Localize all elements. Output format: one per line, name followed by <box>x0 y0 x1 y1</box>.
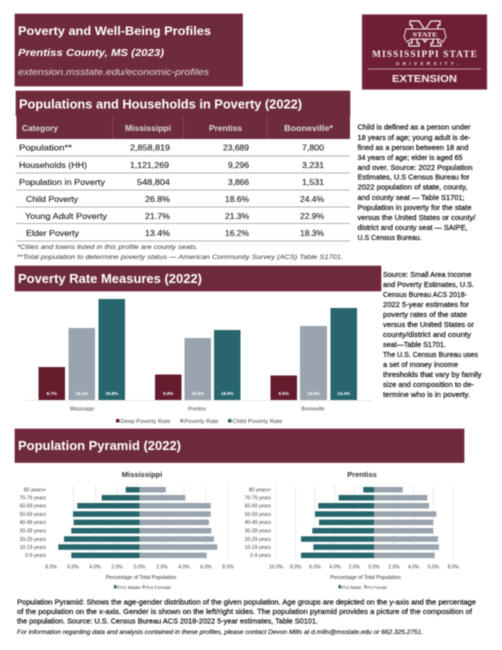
female bars <box>140 487 217 558</box>
row: child poverty <box>26 194 324 204</box>
row: child poverty: 26.8% <box>145 194 170 204</box>
row: young adult poverty: 22.9% <box>300 211 324 221</box>
age labels: 50-59 years <box>20 512 46 518</box>
row: elder poverty: 16.2% <box>225 228 249 238</box>
row: population in poverty <box>19 177 324 187</box>
chart title: Prentiss <box>347 470 377 479</box>
male bars <box>301 487 374 558</box>
x axis ticks: 6.0% <box>428 564 440 570</box>
side note: source: size and composition to de- <box>383 380 474 389</box>
row: population in poverty: Population in Poverty <box>19 177 106 187</box>
section heading: populations and households: Populations and Households in Poverty (2022) <box>19 96 302 112</box>
side note: source: and Poverty Estimates, U.S. <box>383 280 474 289</box>
side note: definitions: and county seat — Table S1701; <box>358 193 464 202</box>
side note: definitions: 34 years of age; elder is aged 65 <box>358 153 462 162</box>
bars: Booneville <box>270 308 357 412</box>
x axis ticks: 4.0% <box>329 564 341 570</box>
x axis ticks: 2.0% <box>349 564 361 570</box>
x axis ticks: 6.0% <box>200 564 212 570</box>
pyramid legend: Pct Male <box>117 585 141 591</box>
chart title: Mississippi <box>122 470 162 479</box>
side note: definitions: and over. Source: 2022 Population <box>358 163 472 172</box>
side note: definitions: versus the United States or county/ <box>358 213 476 222</box>
table footnotes: **Total population to determine poverty status — American Community Survey (ACS) Table S1701. <box>17 254 343 261</box>
side note: definitions: 18 years of age; young adult is de- <box>358 133 471 142</box>
row: young adult poverty: Young Adult Poverty <box>25 211 108 221</box>
x axis ticks: 8.0% <box>45 564 57 570</box>
pyramid legend <box>114 585 171 591</box>
x axis ticks: 0.0% <box>134 564 146 570</box>
age labels: 40-49 years <box>245 520 271 526</box>
x axis ticks: 8.0% <box>222 564 234 570</box>
section heading: population pyramid: Population Pyramid (2022) <box>18 438 181 453</box>
row: population in poverty: 3,866 <box>228 177 249 187</box>
row: households: 9,296 <box>228 160 249 170</box>
side note: source: poverty rates of the state <box>383 310 467 319</box>
x axis ticks: 2.0% <box>388 564 400 570</box>
age labels: 60-69 years <box>245 504 271 510</box>
row: young adult poverty: 21.3% <box>225 211 249 221</box>
section heading: poverty rate measures <box>15 266 381 291</box>
row: child poverty: 18.6% <box>225 194 249 204</box>
male bars <box>58 487 139 558</box>
side note: source: 2022 5-year estimates for <box>383 300 470 309</box>
x axis title: Percentage of Total Population <box>106 575 176 581</box>
logo: Mississippi State Extension <box>362 14 487 90</box>
bars: Mississippi <box>38 299 125 412</box>
side note: source: Census Bureau ACS 2018- <box>383 290 467 299</box>
age labels: 10-19 years <box>245 545 271 551</box>
website link: extension.msstate.edu/economic-profiles <box>18 67 209 78</box>
x axis ticks: 4.0% <box>178 564 190 570</box>
age labels: 80 years+ <box>24 488 46 494</box>
age labels: 0-9 years <box>250 553 271 559</box>
section heading: poverty rate measures: Poverty Rate Measures (2022) <box>18 271 202 286</box>
chart legend: Deep Poverty Rate <box>120 419 170 425</box>
row: population in poverty: 548,804 <box>137 177 170 187</box>
header banner <box>15 14 242 86</box>
age labels: 80 years+ <box>249 488 271 494</box>
bars: Mississippi: 19.1% <box>75 391 88 396</box>
side note: source: county/district and county <box>383 330 471 339</box>
side note: definitions <box>358 122 476 242</box>
side note: definitions: 2022 population of state, county, <box>358 182 468 192</box>
table header: Booneville* <box>284 123 334 133</box>
bars: Prentiss: 16.5% <box>191 391 204 396</box>
pyramid legend: Pct Female <box>367 585 387 591</box>
row: elder poverty <box>26 228 324 238</box>
table footnotes <box>17 244 343 261</box>
pyramid legend: Pct Male <box>342 585 362 591</box>
row: elder poverty: Elder Poverty <box>26 228 80 238</box>
age labels: 70-79 years <box>20 496 46 502</box>
age labels: 0-9 years <box>25 553 46 559</box>
x axis ticks: 2.0% <box>111 564 123 570</box>
age labels: 20-29 years <box>245 537 271 543</box>
pyramid description <box>17 598 476 626</box>
x axis ticks: 6.0% <box>67 564 79 570</box>
chart legend <box>116 419 282 425</box>
bars: Booneville: Booneville <box>301 406 325 412</box>
bar chart: poverty rates <box>24 299 372 425</box>
row: elder poverty: 13.4% <box>145 228 170 238</box>
x axis ticks <box>269 564 460 570</box>
bars: Prentiss: 18.6% <box>221 391 234 396</box>
row: population: Population** <box>19 142 73 152</box>
side note: source: a set of money income <box>383 360 458 369</box>
pyramid description: of the population on the x-axis. Gender is shown on the left/right sides. The population pyramid provides a picture of the composition of <box>17 607 473 616</box>
age labels: 60-69 years <box>20 504 46 510</box>
age labels: 40-49 years <box>20 520 46 526</box>
pyramid chart: Prentiss <box>245 470 460 591</box>
poverty table <box>16 116 350 241</box>
row: population in poverty: 1,531 <box>302 177 324 187</box>
x axis ticks <box>45 564 234 570</box>
section heading: population pyramid <box>15 429 464 462</box>
row: young adult poverty: 21.7% <box>145 211 170 221</box>
bars: Booneville: 19.6% <box>307 391 320 396</box>
side note: definitions: Child is defined as a person under <box>358 122 471 132</box>
x axis ticks: 0.0% <box>368 564 380 570</box>
side note: source: seat—Table S1701. <box>383 340 446 349</box>
bars: Prentiss: 6.8% <box>163 391 173 396</box>
bars: Booneville: 6.5% <box>279 391 289 396</box>
age labels: 70-79 years <box>245 496 271 502</box>
x axis ticks: 4.0% <box>408 564 420 570</box>
row: young adult poverty <box>25 211 324 221</box>
logo extension: EXTENSION <box>392 73 457 85</box>
x axis title: Percentage of Total Population <box>330 575 401 581</box>
bars: Mississippi: Mississippi <box>70 406 94 412</box>
logo university: UNIVERSITY. <box>396 61 458 66</box>
side note: source <box>383 270 482 399</box>
row: population: 7,800 <box>302 142 324 152</box>
bars: Prentiss <box>155 330 240 412</box>
row: population: 23,689 <box>223 142 249 152</box>
age labels: 20-29 years <box>20 537 46 543</box>
side note: source: termine who is in poverty. <box>383 390 470 399</box>
age labels: 10-19 years <box>20 545 46 551</box>
age labels <box>245 488 271 559</box>
side note: source: The U.S. Census Bureau uses <box>383 350 478 359</box>
row: households <box>19 160 324 170</box>
row: population: 2,858,819 <box>130 142 170 152</box>
table header: Category <box>22 123 58 133</box>
icon: M emblem: STATE <box>412 32 438 38</box>
table footnotes: *Cities and towns listed in this profile are county seats. <box>17 244 198 251</box>
age labels: 30-39 years <box>20 528 46 534</box>
side note: definitions: Estimates, U.S Census Bureau for <box>358 172 470 182</box>
x axis ticks: 10.0% <box>269 564 284 570</box>
x axis ticks: 8.0% <box>448 564 460 570</box>
pyramid chart: Mississippi <box>20 470 234 591</box>
bars: Prentiss: Prentiss <box>188 406 207 412</box>
x axis ticks: 8.0% <box>290 564 302 570</box>
row: households: 1,121,269 <box>130 160 169 170</box>
x axis ticks: 6.0% <box>309 564 321 570</box>
row: households: Households (HH) <box>19 160 87 170</box>
side note: definitions: U.S Census Bureau. <box>358 233 422 242</box>
side note: definitions: district and county seat — SAIPE, <box>358 223 468 232</box>
age labels: 50-59 years <box>245 512 271 518</box>
side note: source: thresholds that vary by family <box>383 370 482 379</box>
table header <box>16 116 350 139</box>
x axis ticks: 4.0% <box>89 564 101 570</box>
side note: definitions: Population in poverty for the state <box>358 203 472 212</box>
pyramid description: the population. Source: U.S. Census Bureau ACS 2018-2022 5-year estimates, Table S0101. <box>17 616 318 626</box>
row: households: 3,231 <box>302 160 324 170</box>
pyramid legend: Pct Female <box>146 585 171 591</box>
chart legend: Poverty Rate <box>184 419 218 425</box>
x axis ticks: 2.0% <box>156 564 168 570</box>
title: Poverty and Well-Being Profiles <box>18 24 211 38</box>
side note: definitions: fined as a person between 18 and <box>358 143 468 152</box>
row: population <box>19 142 324 152</box>
logo wordmark: MISSISSIPPI STATE <box>372 50 477 60</box>
row: child poverty: Child Poverty <box>26 194 79 204</box>
chart legend: Child Poverty Rate <box>232 419 282 425</box>
female bars <box>374 487 439 558</box>
age labels <box>20 488 46 559</box>
row: child poverty: 24.4% <box>300 194 324 204</box>
side note: source: versus the United States or <box>383 320 474 329</box>
age labels: 30-39 years <box>245 528 271 534</box>
subtitle: county: Prentiss County, MS (2023) <box>18 47 165 59</box>
row: elder poverty: 18.3% <box>300 228 324 238</box>
table header: Prentiss <box>209 123 242 133</box>
pyramid legend <box>338 585 387 591</box>
contact line: For information regarding data and analysis contained in these profiles, please contact Devon Mills at d.mills@msstate.edu or 662.325.2751. <box>17 629 423 636</box>
side note: source: Source: Small Area Income <box>383 270 472 279</box>
table header: Mississippi <box>125 123 171 133</box>
bars: Mississippi: 8.7% <box>47 391 57 396</box>
pyramid description: Population Pyramid: Shows the age-gender distribution of the given population. Age groups are depicted on the y-axis and the percentage <box>17 598 476 606</box>
bars: Booneville: 24.4% <box>337 391 350 396</box>
section heading: populations and households <box>16 91 350 116</box>
bars: Mississippi: 26.8% <box>105 391 118 396</box>
